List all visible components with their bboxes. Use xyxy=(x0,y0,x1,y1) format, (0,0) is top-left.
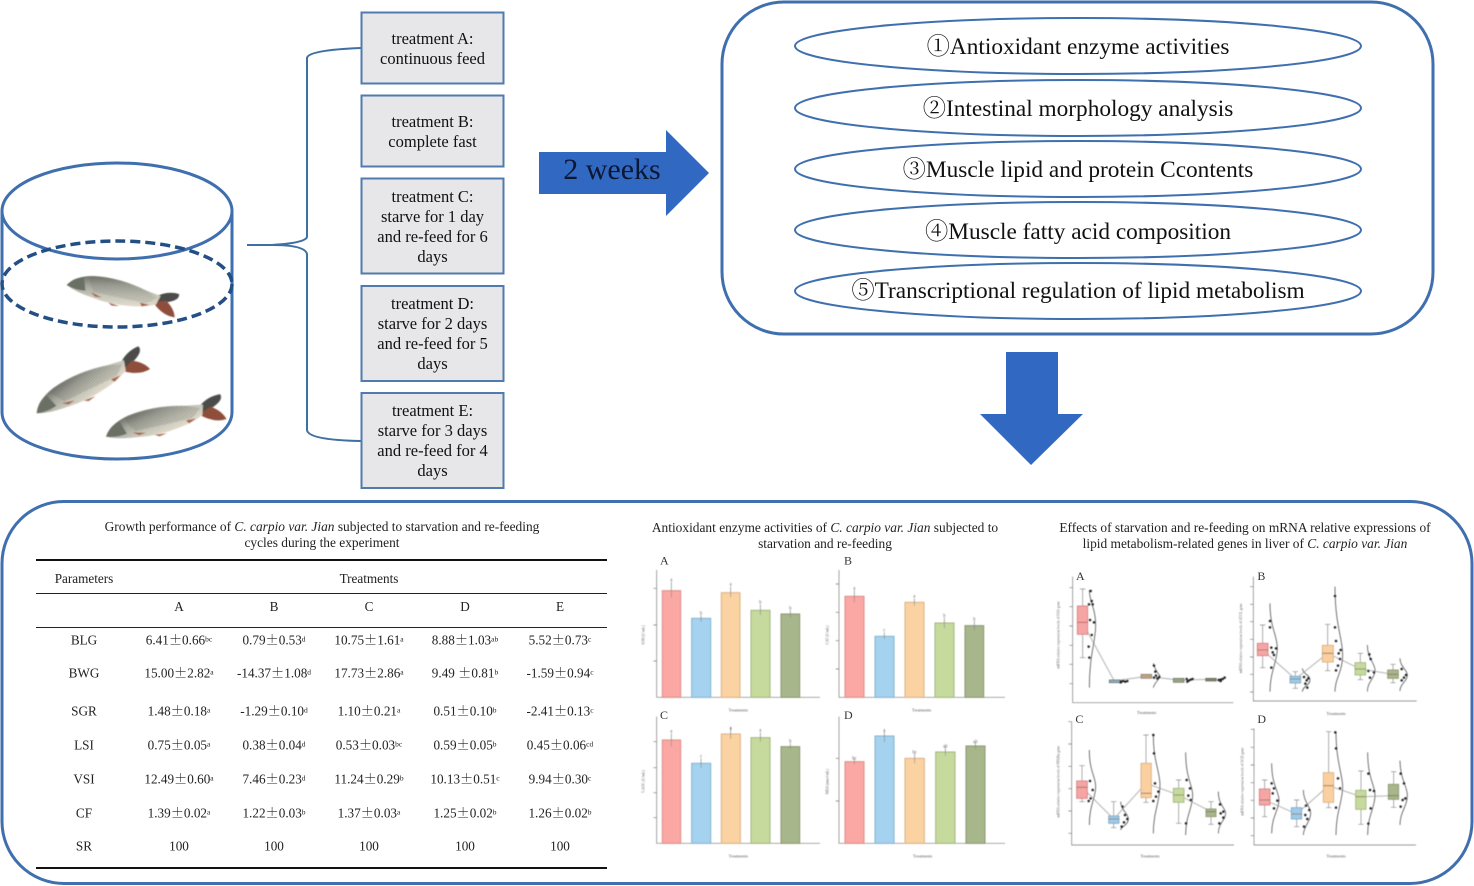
row SR: SR xyxy=(76,838,92,854)
row VSI xyxy=(73,768,592,788)
bar chart C: T-AOC (U/mL) xyxy=(642,769,646,793)
bar chart A: A xyxy=(660,554,669,568)
row VSI: 9.94±0.30 xyxy=(529,768,588,788)
bar chart B: Treatments xyxy=(912,708,932,713)
tank cylinder xyxy=(2,163,232,459)
row SGR: c xyxy=(590,706,594,714)
box plot D xyxy=(1240,712,1416,859)
row VSI: a xyxy=(210,774,214,782)
treatment C box: starve for 1 day xyxy=(381,207,485,226)
bar chart C: c xyxy=(700,755,702,760)
bar chart B: c xyxy=(883,629,885,634)
box plot A xyxy=(1056,569,1233,715)
bar chart D: D xyxy=(844,708,853,722)
treatment E box: days xyxy=(417,461,448,480)
analysis 2: ②Intestinal morphology analysis xyxy=(923,95,1233,122)
bar chart C: a xyxy=(730,726,732,731)
row CF: 1.25±0.02 xyxy=(433,802,493,822)
analysis 3: ③Muscle lipid and protein Ccontents xyxy=(903,156,1253,183)
box plot B: B xyxy=(1257,569,1265,583)
treatment B box xyxy=(362,96,504,166)
bar chart D: ab xyxy=(973,740,978,745)
heading: antioxidant charts: starvation and re-feeding xyxy=(758,536,892,551)
row SGR: 1.10±0.21 xyxy=(338,700,397,720)
table title: Growth performance of C. carpio var. Jian subjected to starvation and re-feeding xyxy=(105,519,540,534)
row BLG: 8.88±1.03 xyxy=(432,630,491,648)
treatment E box xyxy=(362,393,504,488)
row BLG: 6.41±0.66 xyxy=(146,630,205,648)
bar chart A: SOD (U/mL) xyxy=(642,625,646,645)
row BWG: -1.59±0.94 xyxy=(526,662,590,682)
treatment B box: treatment B: xyxy=(391,112,474,131)
row VSI: 11.24±0.29 xyxy=(334,768,400,788)
analysis 4 xyxy=(795,202,1361,258)
row BWG xyxy=(69,662,594,682)
treatment A box: treatment A: xyxy=(391,29,474,48)
icon: fish tank with three fish xyxy=(2,163,232,468)
row SGR: a xyxy=(207,706,211,714)
panel: results xyxy=(2,502,1472,884)
treatment D box: starve for 2 days xyxy=(378,314,487,333)
bar chart C: a xyxy=(759,729,761,734)
table header: Parameters xyxy=(55,571,113,586)
bar chart B: b xyxy=(973,617,976,622)
treatment E box: starve for 3 days xyxy=(378,421,487,440)
bar chart C xyxy=(642,708,820,859)
bar chart C: b xyxy=(789,739,792,744)
row SR: 100 xyxy=(550,838,570,854)
box plot B: Treatments xyxy=(1326,711,1346,716)
heading: gene expression charts xyxy=(1059,520,1431,551)
box plot A: A xyxy=(1076,569,1085,583)
treatment D box xyxy=(362,286,504,381)
box plot D: D xyxy=(1257,712,1266,726)
table header: D xyxy=(460,599,470,614)
row VSI: 12.49±0.60 xyxy=(144,768,210,788)
treatment A box xyxy=(362,12,504,84)
box plot D: mRNA relative expression levels of SCD gene xyxy=(1240,747,1244,816)
row CF: 1.26±0.02 xyxy=(528,802,588,822)
row VSI: VSI xyxy=(73,772,95,786)
row CF xyxy=(76,802,592,822)
treatment boxes xyxy=(362,12,504,488)
row SR xyxy=(76,838,570,854)
bar chart D: ab xyxy=(943,744,948,749)
table title xyxy=(105,519,540,550)
treatment D box: and re-feed for 5 xyxy=(377,334,488,353)
row VSI: b xyxy=(400,774,404,782)
row SGR xyxy=(71,700,594,720)
table header: E xyxy=(556,599,564,614)
row LSI: d xyxy=(302,740,306,748)
table header: A xyxy=(174,599,184,614)
treatment C box: treatment C: xyxy=(391,187,474,206)
table rules xyxy=(36,560,607,868)
row BWG: 15.00±2.82 xyxy=(144,662,210,682)
row SGR: 1.48±0.18 xyxy=(148,700,207,720)
panel: analyses xyxy=(722,2,1433,334)
row BWG: d xyxy=(307,668,311,676)
row CF: a xyxy=(207,808,211,816)
bar chart D xyxy=(825,708,1005,859)
analysis 5: ⑤Transcriptional regulation of lipid metabolism xyxy=(851,277,1305,304)
row BLG: 10.75±1.61 xyxy=(334,630,400,648)
box plot B: mRNA relative expression levels of ATGL gene xyxy=(1239,603,1243,673)
chart: gene expression box plots xyxy=(1056,569,1417,859)
row BLG: d xyxy=(302,634,306,644)
box plot C: mRNA relative expression levels of PPARα gene xyxy=(1056,745,1060,817)
bar chart B: b xyxy=(943,614,946,619)
row SR: 100 xyxy=(264,838,284,854)
bar chart D: MDA (nmol/mL) xyxy=(825,768,829,794)
bar chart C: Treatments xyxy=(729,854,748,859)
row LSI: LSI xyxy=(74,738,94,752)
brace linking tank to treatments xyxy=(247,48,361,441)
heading: gene expression charts: Effects of starvation and re-feeding on mRNA relative expressions of xyxy=(1059,520,1431,535)
bar chart B: a xyxy=(913,595,915,600)
table header: B xyxy=(270,599,279,614)
table: growth performance xyxy=(36,519,607,868)
row SGR: SGR xyxy=(71,704,97,718)
treatment C box: days xyxy=(417,247,448,266)
row SGR: a xyxy=(397,706,401,714)
row BWG: c xyxy=(590,668,594,676)
bar chart D: Treatments xyxy=(913,854,933,859)
fish top xyxy=(67,276,179,317)
row VSI: 7.46±0.23 xyxy=(242,768,302,788)
row SR: 100 xyxy=(455,838,475,854)
row VSI: c xyxy=(588,774,592,782)
row VSI: 10.13±0.51 xyxy=(430,768,496,788)
bar chart A xyxy=(642,554,820,713)
row LSI: 0.45±0.06 xyxy=(527,734,586,754)
fish lower right xyxy=(102,377,231,468)
treatment B box: complete fast xyxy=(388,132,477,151)
row BWG: a xyxy=(400,668,404,676)
table header: C xyxy=(365,599,374,614)
box plot B xyxy=(1239,569,1417,716)
bar chart A: a xyxy=(730,583,732,588)
bar chart D: bc xyxy=(912,751,917,756)
analysis 4: ④Muscle fatty acid composition xyxy=(925,218,1231,245)
arrow: 2 weeks xyxy=(539,130,709,216)
row LSI xyxy=(74,734,593,754)
treatment C box xyxy=(362,178,504,274)
row CF: 1.39±0.02 xyxy=(148,802,207,822)
treatment D box: treatment D: xyxy=(391,294,474,313)
bar chart A: b xyxy=(789,606,792,611)
row VSI: c xyxy=(496,774,500,782)
row CF: b xyxy=(493,808,497,816)
analysis 3 xyxy=(795,141,1361,197)
row SGR: 0.51±0.10 xyxy=(433,700,493,720)
row BWG: -14.37±1.08 xyxy=(237,662,307,682)
row BLG: a xyxy=(400,634,404,644)
row LSI: a xyxy=(207,740,211,748)
treatment D box: days xyxy=(417,354,448,373)
row CF: CF xyxy=(76,806,92,820)
bar chart C: C xyxy=(660,708,668,722)
heading: gene expression charts: lipid metabolism-related genes in liver of C. carpio var. Jian xyxy=(1083,536,1408,551)
row LSI: b xyxy=(493,740,497,748)
heading: antioxidant charts xyxy=(652,520,998,551)
bar chart C: a xyxy=(670,730,672,735)
treatment A box: continuous feed xyxy=(380,49,486,68)
bar chart D: bc xyxy=(852,756,857,761)
bar chart B xyxy=(825,554,1005,713)
bar chart B: CAT (U/mL) xyxy=(825,625,829,644)
table header: Treatments xyxy=(340,571,398,586)
row CF: a xyxy=(397,808,401,816)
row BWG: a xyxy=(210,668,214,676)
table header xyxy=(55,571,564,614)
row BLG xyxy=(71,630,592,648)
treatment E box: and re-feed for 4 xyxy=(377,441,488,460)
box plot C: C xyxy=(1075,712,1083,726)
analysis 1: ①Antioxidant enzyme activities xyxy=(927,33,1229,60)
row LSI: cd xyxy=(586,740,593,748)
row CF: b xyxy=(588,808,592,816)
row SR: 100 xyxy=(169,838,189,854)
row SR: 100 xyxy=(359,838,379,854)
row CF: 1.37±0.03 xyxy=(338,802,397,822)
row BLG: 0.79±0.53 xyxy=(242,630,302,648)
row BLG: bc xyxy=(205,634,213,644)
row SGR: -1.29±0.10 xyxy=(240,700,304,720)
row VSI: d xyxy=(302,774,306,782)
row BWG: 9.49 ±0.81 xyxy=(432,662,494,682)
row CF: b xyxy=(302,808,306,816)
row SGR: d xyxy=(304,706,308,714)
row BLG: c xyxy=(588,634,592,644)
chart: antioxidant bars xyxy=(642,554,1005,859)
fish lower left xyxy=(31,331,154,441)
bar chart A: b xyxy=(759,601,762,606)
row SGR: b xyxy=(493,706,497,714)
row BLG: ab xyxy=(491,634,498,644)
row CF: 1.22±0.03 xyxy=(242,802,302,822)
row BWG: b xyxy=(494,668,498,676)
bar chart D: a xyxy=(883,729,885,734)
box plot A: mRNA relative expression levels of FAS gene xyxy=(1056,601,1060,669)
box plot D: Treatments xyxy=(1326,854,1346,859)
row LSI: bc xyxy=(395,740,403,748)
row LSI: 0.75±0.05 xyxy=(148,734,207,754)
analysis 1 xyxy=(795,18,1361,74)
box plot A: Treatments xyxy=(1137,710,1157,715)
bar chart A: Treatments xyxy=(729,708,748,713)
box plot C: Treatments xyxy=(1140,854,1160,859)
bar chart B: a xyxy=(853,586,855,591)
arrow: 2 weeks: 2 weeks xyxy=(563,153,661,186)
row SGR: -2.41±0.13 xyxy=(526,700,590,720)
bar chart A: b xyxy=(700,611,703,616)
heading: antioxidant charts: Antioxidant enzyme activities of C. carpio var. Jian subjected to xyxy=(652,520,998,535)
bar chart B: B xyxy=(844,554,852,568)
row LSI: 0.59±0.05 xyxy=(433,734,493,754)
row LSI: 0.38±0.04 xyxy=(242,734,302,754)
row BLG: 5.52±0.73 xyxy=(529,630,588,648)
row LSI: 0.53±0.03 xyxy=(336,734,395,754)
row BWG: 17.73±2.86 xyxy=(334,662,400,682)
treatment C box: and re-feed for 6 xyxy=(377,227,488,246)
arrow: down xyxy=(980,352,1083,465)
box plot C xyxy=(1056,712,1234,859)
table title: cycles during the experiment xyxy=(244,535,400,550)
water level dashed ellipse xyxy=(2,241,232,327)
row BWG: BWG xyxy=(69,666,100,680)
analysis 2 xyxy=(795,80,1361,136)
bar chart A: a xyxy=(670,578,672,583)
treatment E box: treatment E: xyxy=(392,401,473,420)
analysis 5 xyxy=(795,263,1361,319)
fish group xyxy=(31,276,231,468)
row BLG: BLG xyxy=(71,632,98,648)
